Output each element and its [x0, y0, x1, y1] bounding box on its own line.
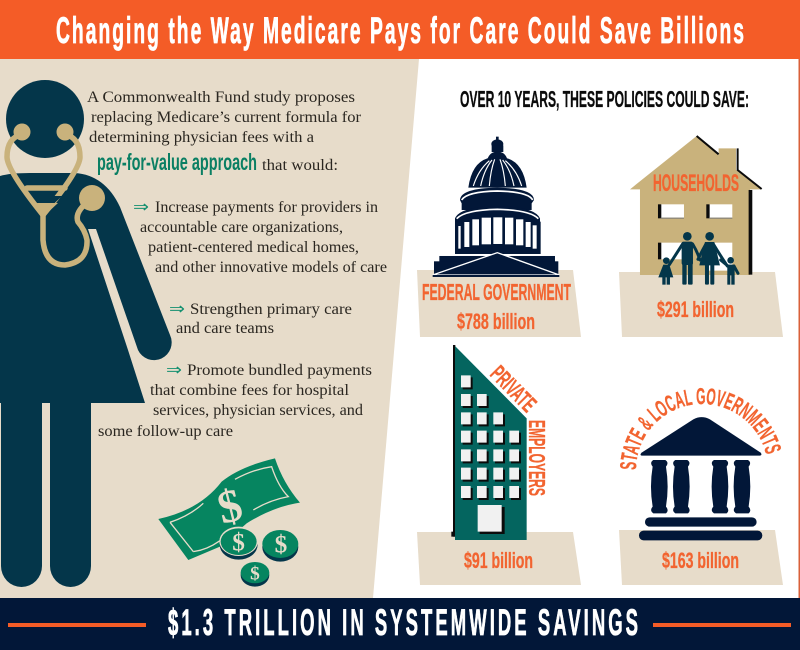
panel: private employers	[417, 345, 581, 585]
text block: third policy bullet: Promote bundled payments	[187, 362, 372, 379]
label: federal government: FEDERAL GOVERNMENT	[422, 279, 571, 305]
text block: first policy bullet: patient-centered medical homes,	[148, 239, 359, 256]
footer banner: total savings: $1.3 TRILLION IN SYSTEMWIDE SAVINGS	[168, 603, 638, 644]
icon: house with family	[630, 136, 762, 285]
text block: third policy bullet: ⇒	[166, 360, 182, 379]
text block: first policy bullet: accountable care organizations,	[140, 219, 343, 236]
icon: office building	[451, 345, 527, 540]
icon: dollar bill and coins: $	[232, 529, 245, 557]
text block: study introduction: determining physician fees with a	[89, 129, 314, 146]
panel: households	[619, 136, 783, 337]
text block: third policy bullet: services, physician services, and	[153, 402, 363, 419]
text block: first policy bullet: and other innovative models of care	[155, 259, 387, 276]
amount: federal government: $788 billion	[457, 309, 535, 334]
text block: first policy bullet: ⇒	[133, 197, 149, 216]
label: private: PRIVATE	[485, 360, 542, 417]
text block: third policy bullet: that combine fees for hospital	[150, 382, 349, 399]
label: state and local governments: STATE & LOCAL GOVERNMENTS	[620, 388, 781, 470]
text block: study introduction: replacing Medicare’s current formula for	[91, 109, 362, 126]
icon: dollar bill and coins: $	[250, 563, 260, 584]
label: employers: EMPLOYERS	[524, 420, 550, 496]
amount: private employers: $91 billion	[464, 548, 533, 573]
text block: study introduction: A Commonwealth Fund study proposes	[87, 89, 355, 106]
icon: doctor figure with stethoscope	[0, 80, 172, 587]
icon: dollar bill and coins: $	[275, 531, 287, 559]
icon: dollar bill and coins: $	[212, 479, 248, 535]
footer banner: total savings	[0, 598, 800, 650]
title banner: Changing the Way Medicare Pays for Care Could Save Billions	[56, 10, 744, 52]
amount: state and local governments: $163 billion	[662, 548, 739, 573]
icon: dollar bill and coins	[158, 458, 300, 587]
text block: study introduction: pay-for-value approach	[97, 149, 257, 175]
panel: federal government	[417, 137, 581, 337]
text block: study introduction	[87, 89, 362, 175]
text block: study introduction: that would:	[262, 157, 338, 174]
icon: temple with columns	[639, 417, 762, 540]
text block: first policy bullet	[133, 197, 387, 276]
text block: first policy bullet: Increase payments for providers in	[155, 199, 378, 216]
text block: second policy bullet	[169, 299, 352, 337]
text block: third policy bullet	[98, 360, 372, 440]
panel: state and local governments	[619, 388, 783, 585]
amount: households: $291 billion	[657, 297, 734, 322]
icon: capitol building	[433, 137, 559, 277]
text block: second policy bullet: ⇒	[169, 299, 185, 318]
text block: second policy bullet: and care teams	[176, 320, 274, 337]
text block: third policy bullet: some follow-up care	[98, 423, 233, 440]
text block: second policy bullet: Strengthen primary care	[190, 301, 352, 318]
panel: study summary background	[0, 59, 419, 598]
title banner	[0, 0, 800, 59]
